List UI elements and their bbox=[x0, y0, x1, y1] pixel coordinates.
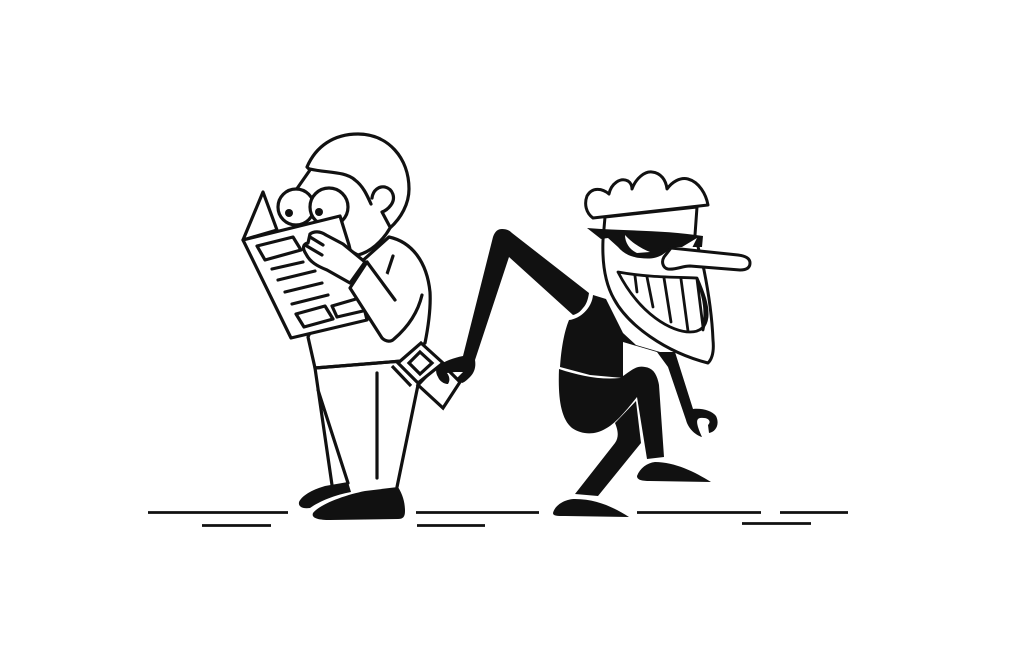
thief: front foot bbox=[553, 499, 629, 517]
thief: back foot bbox=[637, 462, 711, 482]
man: legs and trousers bbox=[315, 361, 418, 487]
thief: far arm and hand bbox=[623, 333, 718, 437]
thief: face bbox=[603, 207, 713, 363]
thief: black mask bbox=[587, 228, 703, 259]
thief: hat bbox=[586, 172, 708, 218]
man: hand bbox=[304, 232, 365, 283]
thief: torso bbox=[560, 295, 623, 378]
thief: arm reaching to wallet bbox=[436, 229, 589, 384]
wallet and banknote bbox=[392, 343, 460, 408]
thief: nose bbox=[663, 248, 750, 270]
man: head bbox=[296, 134, 409, 255]
man: shoes bbox=[299, 482, 405, 520]
man: eyes bbox=[278, 188, 348, 226]
ground lines bbox=[148, 512, 848, 526]
thief: lower leg bbox=[575, 401, 641, 496]
thief: hips and thigh bbox=[559, 367, 664, 459]
man: newspaper bbox=[243, 192, 367, 338]
man: sleeve bbox=[350, 262, 422, 341]
thief: eye holes bbox=[625, 235, 697, 253]
thief: mouth and teeth bbox=[618, 272, 707, 332]
thief: head bbox=[586, 172, 750, 363]
man: collar line bbox=[385, 256, 393, 280]
man: ear bbox=[372, 187, 393, 227]
man reading bbox=[243, 134, 430, 487]
man: torso and shoulder bbox=[308, 237, 430, 368]
